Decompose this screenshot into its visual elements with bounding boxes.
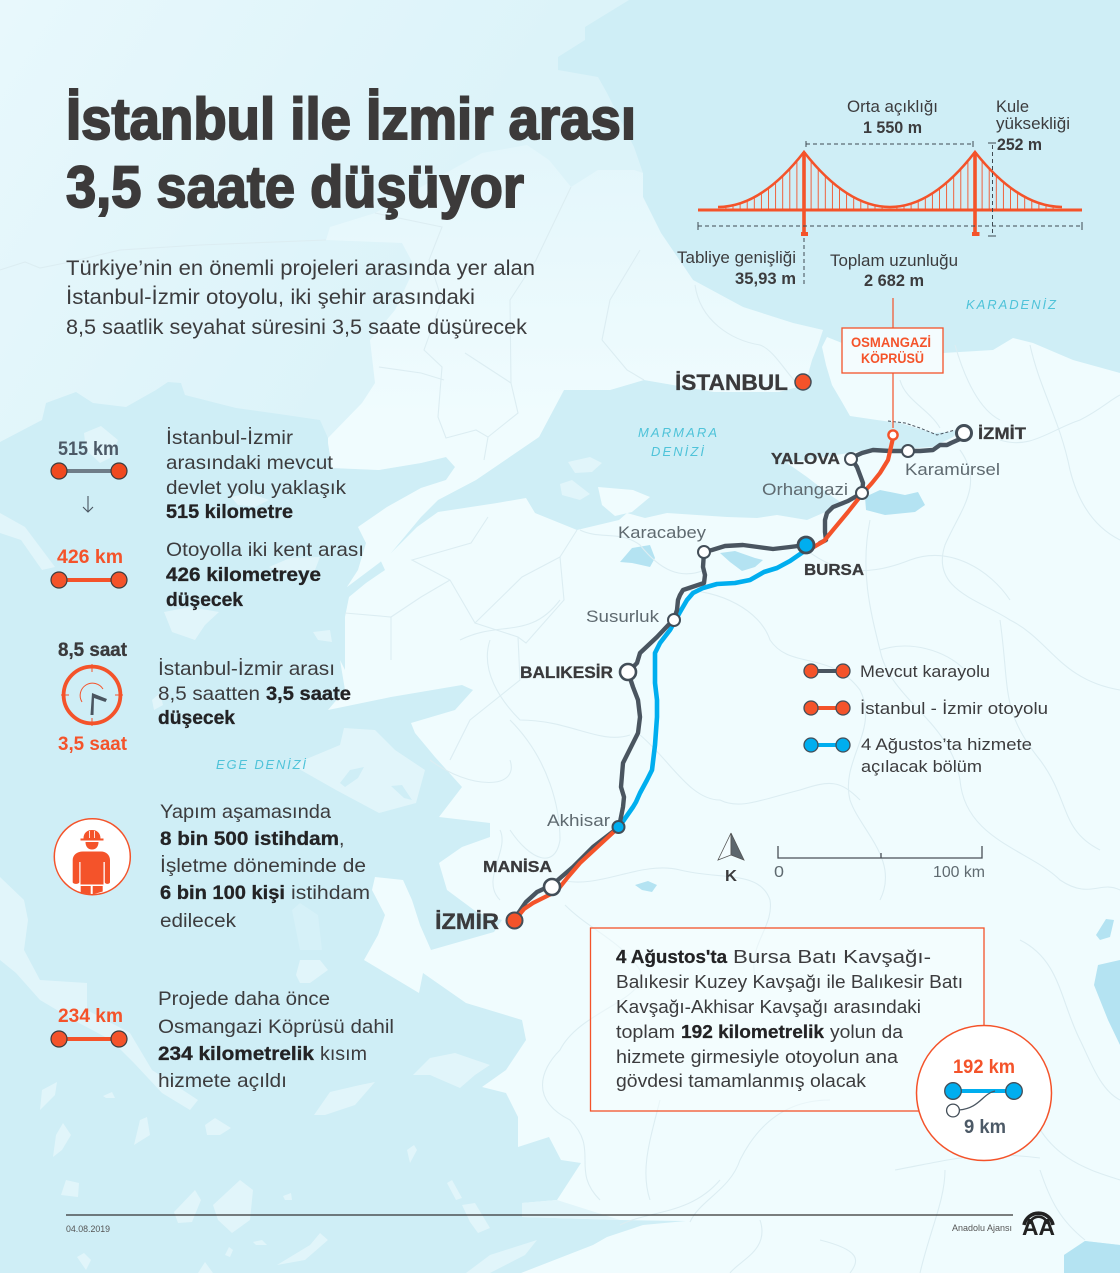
circle: 192 km and 9 km: [916, 1026, 1052, 1160]
Turkish Thrace: [326, 145, 823, 587]
footer: 04.08.2019: [66, 1224, 110, 1235]
bridge labels: 252 m: [997, 135, 1042, 154]
bridge labels: [677, 97, 1070, 290]
stat: 426 km: 426 km: [57, 547, 123, 568]
stat: 426 km: 426 kilometreye: [166, 564, 321, 586]
stat: employment: İşletme döneminde de: [160, 854, 366, 877]
stat: 234 km: Osmangazi Köprüsü dahil: [158, 1016, 394, 1038]
bridge labels: Orta açıklığı: [847, 97, 938, 116]
legend: existing road: Mevcut karayolu: [860, 662, 990, 681]
sea labels: MARMARA: [638, 425, 717, 440]
icon: construction worker: [54, 819, 130, 895]
info box: 4 August: 192 kilometrelik: [681, 1022, 825, 1042]
north arrow: [718, 833, 744, 885]
Osmangazi bridge callout: KÖPRÜSÜ: [861, 351, 924, 366]
stat: employment: ,: [339, 828, 344, 850]
stat: employment: [54, 801, 370, 932]
north arrow: K: [725, 868, 737, 885]
city labels: YALOVA: [771, 451, 840, 468]
city labels: İZMİT: [978, 424, 1027, 443]
info box: 4 August: Balıkesir Kuzey Kavşağı ile Balıkesir Batı: [616, 972, 963, 992]
intro text: İstanbul-İzmir otoyolu, iki şehir arasındaki: [66, 286, 475, 309]
sea labels: KARADENİZ: [966, 297, 1057, 312]
city labels: MANİSA: [483, 858, 552, 876]
legend: new section: açılacak bölüm: [861, 757, 982, 776]
Osmangazi bridge callout: [842, 298, 943, 440]
scale bar: [774, 846, 985, 881]
icon: Anadolu Agency logo: AA: [1022, 1214, 1055, 1240]
info box: 4 August: toplam: [616, 1022, 675, 1042]
stat: 234 km: hizmete açıldı: [158, 1070, 287, 1092]
title: [66, 87, 636, 220]
stat: 234 km: Projede daha önce: [158, 988, 330, 1010]
stat: 515 km: arasındaki mevcut: [166, 452, 334, 474]
title: 3,5 saate düşüyor: [66, 155, 524, 220]
city labels: Orhangazi: [762, 480, 848, 499]
stat: travel time: 8,5 saatten: [158, 683, 260, 705]
existing road grey: [515, 433, 964, 918]
info box: 4 August: yolun da: [830, 1022, 904, 1042]
stat: 515 km: 515 kilometre: [166, 501, 293, 523]
stat: travel time: [58, 640, 351, 755]
city labels: BALIKESİR: [520, 663, 613, 682]
stat: 426 km: düşecek: [166, 589, 243, 611]
lesbos bays: [340, 767, 412, 800]
intro text: Türkiye’nin en önemli projeleri arasında yer alan: [66, 257, 535, 280]
stat: travel time: 3,5 saate: [266, 683, 351, 705]
legend: new section: [804, 735, 1032, 776]
stat: 234 km: 234 kilometrelik: [158, 1043, 314, 1065]
intro text: 8,5 saatlik seyahat süresini 3,5 saate düşürecek: [66, 316, 528, 339]
city labels: [435, 370, 1027, 934]
icon: clock: [61, 664, 123, 726]
stat: employment: 8 bin 500 istihdam: [160, 828, 339, 850]
bridge labels: Kule: [996, 97, 1029, 116]
footer: Anadolu Ajansı: [952, 1223, 1012, 1234]
info box: 4 August: gövdesi tamamlanmış olacak: [616, 1071, 867, 1091]
sea labels: EGE DENİZİ: [216, 757, 306, 772]
stat: travel time: 3,5 saat: [58, 734, 128, 755]
info box: 4 August: 4 Ağustos'ta: [616, 947, 728, 967]
info box: 4 August: [590, 928, 984, 1111]
scale bar: 100 km: [933, 864, 985, 881]
stat: employment: Yapım aşamasında: [160, 801, 331, 823]
city labels: BURSA: [804, 562, 864, 579]
scale bar: 0: [774, 864, 784, 881]
bridge hangers: [726, 161, 1053, 210]
info box: 4 August: Kavşağı-Akhisar Kavşağı arasındaki: [616, 997, 921, 1017]
stat: 426 km: Otoyolla iki kent arası: [166, 539, 364, 561]
legend: new section: 4 Ağustos’ta hizmete: [861, 735, 1032, 754]
footer: [66, 1213, 1055, 1240]
section opening August 4 blue: [619, 550, 806, 827]
stat: 234 km: kısım: [320, 1043, 367, 1065]
info box: 4 August: hizmete girmesiyle otoyolun ana: [616, 1047, 899, 1067]
city labels: Karamürsel: [905, 460, 1000, 479]
bridge labels: Tabliye genişliği: [677, 248, 796, 267]
legend: existing road: [804, 662, 990, 681]
legend: motorway: İstanbul - İzmir otoyolu: [860, 699, 1048, 718]
city markers: [506, 374, 972, 928]
legend: [804, 662, 1048, 776]
bridge deck and cables: [698, 152, 1082, 236]
intro text: [66, 257, 535, 339]
city labels: Karacabey: [618, 523, 707, 542]
bridge labels: yüksekliği: [996, 114, 1070, 133]
stat: 234 km: 234 km: [58, 1006, 123, 1027]
stat: 515 km: devlet yolu yaklaşık: [166, 477, 346, 499]
city labels: Akhisar: [547, 811, 610, 830]
sea labels: DENİZİ: [651, 444, 704, 459]
bridge labels: 35,93 m: [735, 269, 796, 288]
bridge labels: Toplam uzunluğu: [830, 251, 958, 270]
arrow down: [83, 496, 93, 512]
stat: 234 km: [51, 988, 394, 1092]
city labels: İZMİR: [435, 909, 499, 934]
stat: 515 km: 515 km: [58, 439, 119, 460]
bridge dimensions: [698, 141, 1082, 286]
circle: 192 km and 9 km: 9 km: [964, 1117, 1006, 1138]
stat: 515 km: [51, 426, 346, 523]
route map: [435, 370, 1027, 934]
sea labels: [216, 297, 1057, 772]
info box: 4 August: Bursa Batı Kavşağı-: [733, 947, 931, 967]
tunnel dashed line: [888, 421, 955, 435]
circle: 192 km and 9 km: 192 km: [953, 1057, 1015, 1078]
stat: 426 km: [51, 539, 364, 611]
stat: employment: istihdam: [291, 882, 370, 904]
Osmangazi bridge callout: OSMANGAZİ: [851, 335, 931, 350]
bridge diagram: [677, 97, 1082, 290]
stat: employment: 6 bin 100 kişi: [160, 882, 285, 904]
title: İstanbul ile İzmir arası: [66, 87, 636, 152]
stat: employment: edilecek: [160, 910, 236, 932]
city labels: İSTANBUL: [675, 370, 788, 395]
new motorway orange: [515, 438, 893, 920]
stat: travel time: 8,5 saat: [58, 640, 128, 661]
city labels: Susurluk: [586, 607, 660, 626]
bridge labels: 2 682 m: [864, 271, 924, 290]
stat: travel time: İstanbul-İzmir arası: [158, 657, 335, 680]
stat: travel time: düşecek: [158, 707, 235, 729]
bridge labels: 1 550 m: [863, 118, 922, 137]
lakes: [620, 490, 1120, 1273]
islands: [0, 426, 650, 1273]
stat: 515 km: İstanbul-İzmir: [166, 426, 294, 449]
